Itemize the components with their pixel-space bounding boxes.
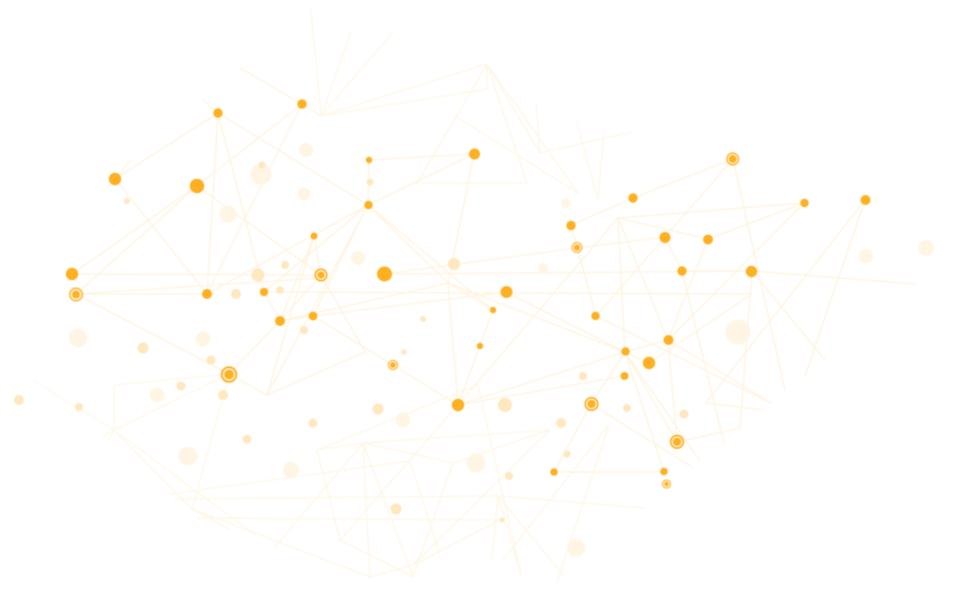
solid orange nodes [66,99,871,476]
pale background circles [68,143,934,557]
small faded circles [14,162,688,522]
ringed nodes [70,153,738,488]
